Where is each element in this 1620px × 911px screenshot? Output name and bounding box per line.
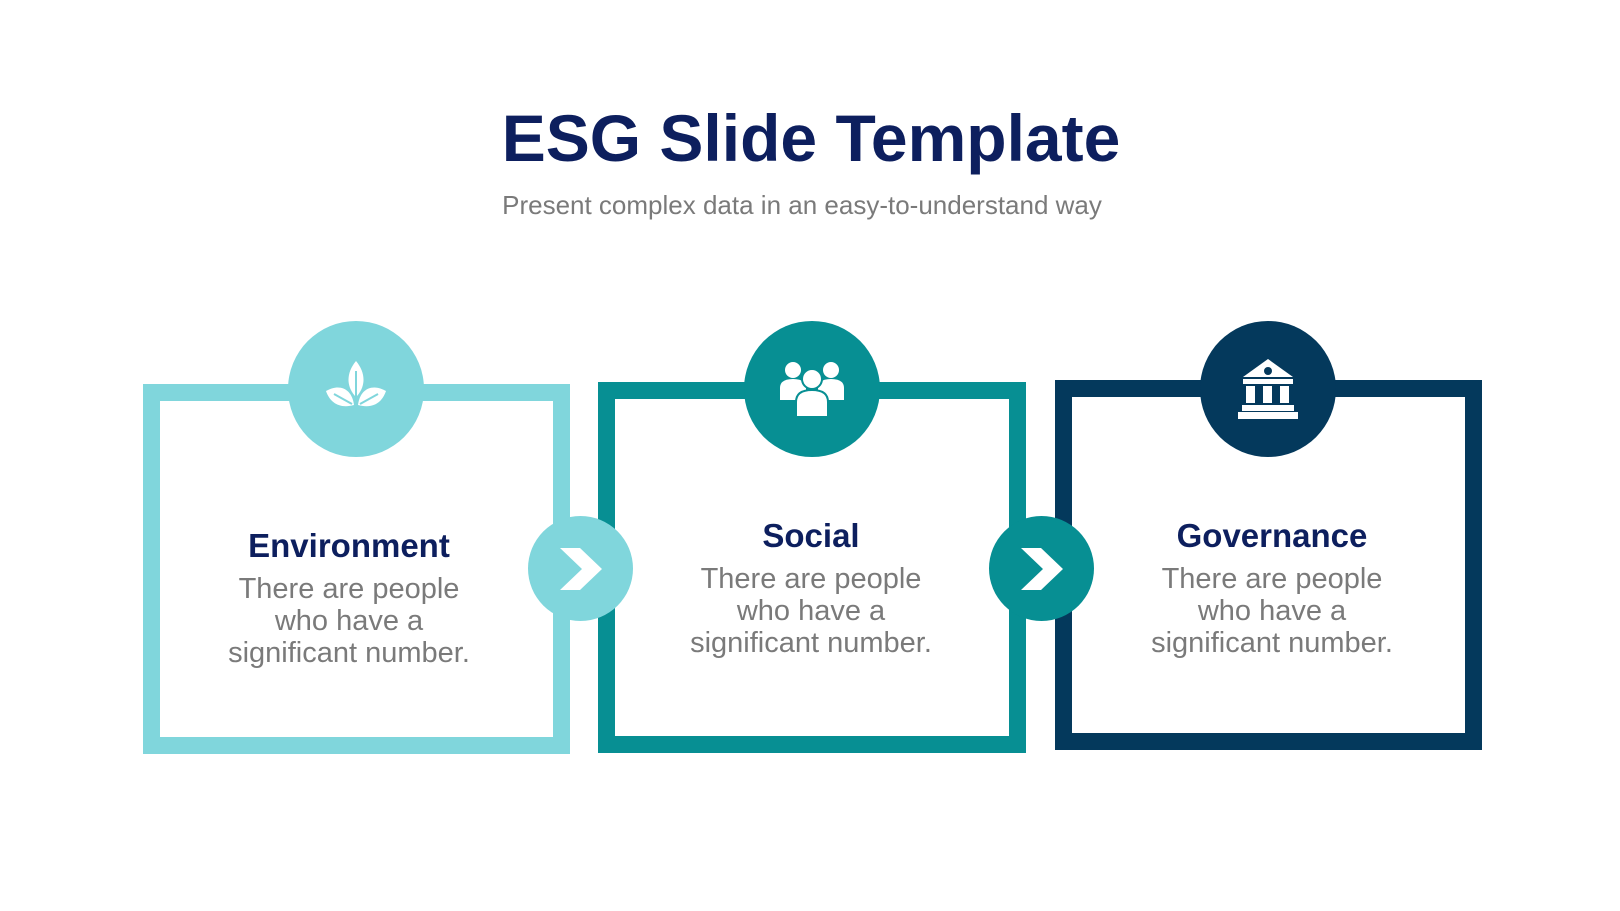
text: social: [690, 517, 932, 659]
subtitle: Present complex data in an easy-to-understand way: [502, 190, 1102, 220]
text: governance: significant number.: [1151, 627, 1393, 659]
text: governance: [1151, 517, 1393, 659]
text: social: who have a: [737, 595, 885, 627]
text: governance: There are people: [1162, 563, 1382, 595]
text: environment: [228, 527, 470, 669]
text: social: Social: [762, 517, 860, 554]
text: governance: Governance: [1177, 517, 1367, 554]
text: environment: There are people: [239, 573, 459, 605]
text: environment: Environment: [248, 527, 450, 564]
panel: environment: [143, 384, 570, 754]
panel: governance: [1055, 380, 1482, 750]
text: social: There are people: [701, 563, 921, 595]
arrow: social to governance: [989, 516, 1094, 621]
title: ESG Slide Template: [502, 101, 1120, 175]
icon: people: [744, 321, 880, 457]
arrow: environment to social: [528, 516, 633, 621]
text: environment: significant number.: [228, 637, 470, 669]
icon: institution: [1200, 321, 1336, 457]
text: environment: who have a: [275, 605, 423, 637]
text: governance: who have a: [1198, 595, 1346, 627]
panel: social: [598, 382, 1026, 753]
text: social: significant number.: [690, 627, 932, 659]
icon: leaf: [288, 321, 424, 457]
